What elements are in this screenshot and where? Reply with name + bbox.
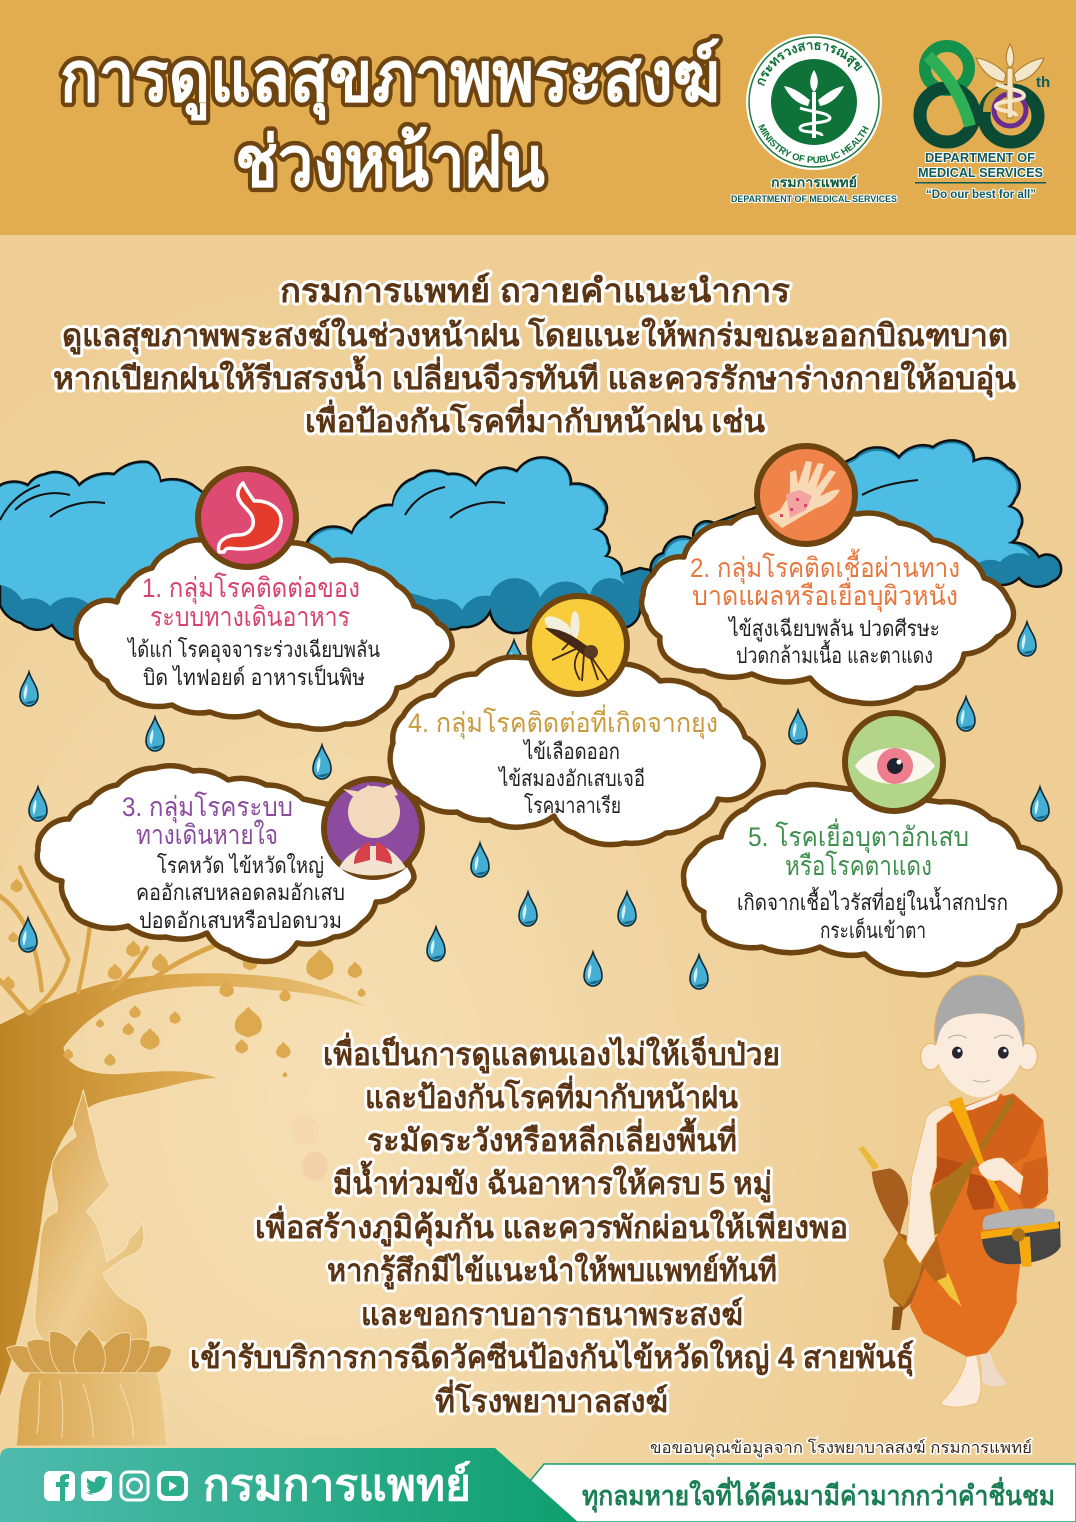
header band [0, 0, 1076, 235]
heading: 4. กลุ่มโรคติดต่อที่เกิดจากยุง [408, 704, 718, 740]
heading: 5. โรคเยื่อบุตาอักเสบ [748, 818, 969, 854]
advice text: และป้องกันโรคที่มากับหน้าฝน [365, 1075, 738, 1115]
advice text: เพื่อสร้างภูมิคุ้มกัน และควรพักผ่อนให้เพียงพอ [255, 1205, 848, 1247]
heading [142, 573, 360, 632]
logo: ministry of public health [730, 34, 898, 204]
text block: บิด ไทฟอยด์ อาหารเป็นพิษ [143, 663, 365, 690]
heading [748, 818, 969, 881]
intro text: เพื่อป้องกันโรคที่มากับหน้าฝน เช่น [305, 399, 765, 439]
advice text: เข้ารับบริการการฉีดวัคซีนป้องกันไข้หวัดใหญ่ 4 สายพันธุ์ [190, 1339, 914, 1377]
title: ช่วงหน้าฝน [235, 123, 545, 201]
intro text: หากเปียกฝนให้รีบสรงน้ำ เปลี่ยนจีวรทันที และควรรักษาร่างกายให้อบอุ่น [53, 355, 1016, 398]
monk illustration [858, 975, 1061, 1407]
heading: 3. กลุ่มโรคระบบ [122, 792, 293, 824]
text block: ไข้เลือดออก [522, 739, 620, 764]
title: การดูแลสุขภาพพระสงฆ์ [60, 38, 720, 121]
advice text: เพื่อเป็นการดูแลตนเองไม่ให้เจ็บป่วย [323, 1032, 780, 1074]
text block: ปวดกล้ามเนื้อ และตาแดง [736, 640, 933, 668]
heading [690, 548, 960, 613]
advice text: ระมัดระวังหรือหลีกเลี่ยงพื้นที่ [367, 1117, 737, 1158]
text block [497, 739, 645, 818]
buddha silhouette [7, 1090, 172, 1446]
logo: 80th anniversary: th [1036, 74, 1050, 91]
advice text: ที่โรงพยาบาลสงฆ์ [435, 1379, 668, 1419]
heading: 1. กลุ่มโรคติดต่อของ [142, 573, 360, 605]
panel: mosquito-borne diseases [390, 596, 763, 845]
icon: instagram [121, 1472, 148, 1500]
advice text: หากรู้สึกมีไข้แนะนำให้พบแพทย์ทันที [327, 1252, 777, 1290]
logo: ministry of public health: กรมการแพทย์ [771, 175, 857, 190]
heading: หรือโรคตาแดง [785, 851, 932, 881]
panel: wound and skin infections [642, 446, 1013, 703]
icon: lungs [324, 779, 422, 877]
logo: 80th anniversary: “Do our best for all” [926, 187, 1036, 201]
icon: youtube [157, 1471, 188, 1501]
heading [122, 792, 293, 850]
text block: ไข้สูงเฉียบพลัน ปวดศีรษะ [727, 616, 940, 642]
icon: rash on hand [757, 446, 855, 544]
credit line: ขอขอบคุณข้อมูลจาก โรงพยาบาลสงฆ์ กรมการแพทย์ [650, 1438, 1032, 1458]
text block [126, 637, 380, 690]
rain cloud: left [0, 462, 240, 645]
icon: stomach [198, 469, 296, 567]
heading: บาดแผลหรือเยื่อบุผิวหนัง [692, 577, 958, 613]
advice text: และขอกราบอาราธนาพระสงฆ์ [361, 1297, 743, 1332]
footer: department band [0, 1448, 578, 1522]
heading: 2. กลุ่มโรคติดเชื้อผ่านทาง [690, 548, 960, 585]
logo: 80th anniversary: MEDICAL SERVICES [918, 165, 1043, 180]
bodhi tree [0, 868, 366, 1446]
rain drops [19, 622, 1049, 989]
intro text: ดูแลสุขภาพพระสงฆ์ในช่วงหน้าฝน โดยแนะให้พกร่มขณะออกบิณฑบาต [62, 317, 1008, 355]
icon: red eye [845, 713, 943, 811]
heading: ระบบทางเดินอาหาร [150, 602, 350, 632]
icon: twitter [81, 1471, 112, 1501]
rain cloud: right [651, 440, 1061, 600]
text block [136, 853, 345, 933]
icon: facebook [44, 1471, 75, 1501]
text block: ปอดอักเสบหรือปอดบวม [139, 908, 342, 933]
text block: โรคหวัด ไข้หวัดใหญ่ [157, 853, 324, 878]
title [60, 38, 720, 201]
text block: ไข้สมองอักเสบเจอี [497, 766, 645, 791]
logo: 80th anniversary: DEPARTMENT OF [925, 150, 1035, 165]
panel: conjunctivitis [684, 713, 1060, 975]
text block: เกิดจากเชื้อไวรัสที่อยู่ในน้ำสกปรก [737, 887, 1008, 916]
logo: ministry of public health: DEPARTMENT OF MEDICAL SERVICES [731, 194, 897, 204]
panel: respiratory diseases [37, 766, 422, 961]
advice text: มีน้ำท่วมขัง ฉันอาหารให้ครบ 5 หมู่ [333, 1160, 772, 1203]
footer: slogan strip [530, 1464, 1076, 1522]
logo: ministry of public health: กระทรวงสาธารณสุข [758, 42, 862, 86]
text block: โรคมาลาเรีย [524, 793, 621, 818]
intro text: กรมการแพทย์ ถวายคำแนะนำการ [280, 272, 790, 309]
rain cloud: middle [307, 457, 668, 644]
footer heading: กรมการแพทย์ [203, 1460, 471, 1510]
panel: digestive diseases [76, 469, 452, 729]
logo: 80th anniversary [915, 44, 1050, 201]
advice text [190, 1032, 914, 1419]
text block: คออักเสบหลอดลมอักเสบ [136, 880, 345, 905]
text block: กระเด็นเข้าตา [820, 916, 926, 943]
text block [727, 616, 940, 668]
heading: ทางเดินหายใจ [136, 819, 278, 850]
intro text [53, 272, 1016, 439]
icon: mosquito [529, 596, 627, 694]
logo: ministry of public health: MINISTRY OF PUBLIC HEALTH [758, 124, 869, 164]
text block [737, 887, 1008, 943]
text block: ได้แก่ โรคอุจจาระร่วงเฉียบพลัน [126, 637, 380, 663]
